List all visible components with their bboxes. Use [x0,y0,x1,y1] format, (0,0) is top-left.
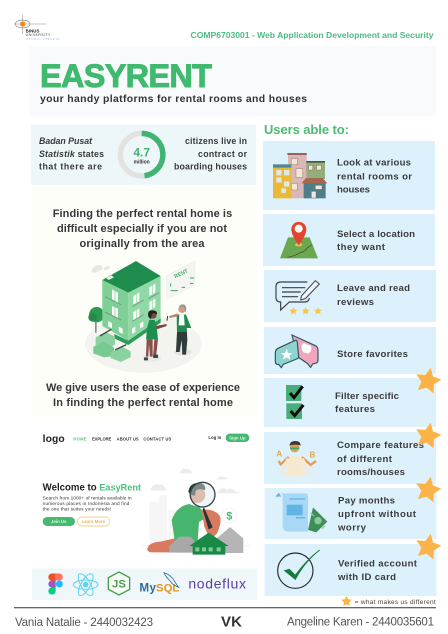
problem statement: difficult especially if you are not [57,223,227,235]
icon: star on verified feature [413,531,443,560]
text: upfront without [338,509,417,520]
text: houses [337,184,370,195]
icon: person comparing A and B [276,441,316,476]
text [337,559,418,583]
text: with ID card [337,572,396,583]
text [337,229,415,253]
icon: map pin [280,222,318,258]
text: Pay months [338,496,395,507]
hero illustration [142,469,250,555]
text [337,496,417,534]
statistic intro text [39,136,104,172]
text: Filter specific [335,391,400,402]
navigation bar: CONTACT US [143,437,172,442]
icon: star on filter feature [413,365,443,394]
statistic closing text: citizens live in [185,136,247,146]
hero text [43,483,141,511]
problem statement [53,208,232,250]
boxes [93,329,131,362]
donut chart: 4.7 million: 4.7 [133,146,150,160]
hero buttons: Join Us [51,519,67,524]
statistic closing text [174,136,248,172]
icon: favorite bubbles [275,335,318,368]
footer: author right: Angeline Karen - 2440035601 [287,617,434,629]
panel: technology logos [32,568,257,600]
hero illustration: $ [226,510,232,522]
solution statement: We give users the ease of experience [46,382,240,394]
hero buttons [43,517,110,526]
logo: BINUS University: UNIVERSITY [26,33,51,37]
hero text: Welcome to [43,483,97,494]
navigation bar: Sign Up [229,435,246,440]
text: of different [337,454,393,465]
icon: Node.js: JS [112,579,126,591]
panel: statistic [31,124,256,185]
footer: initials: VK [221,614,242,630]
legend: star meaning [341,596,436,606]
icon: React [73,572,98,598]
logo: BINUS University: Innovation in Education [26,38,60,41]
text: Select a location [337,229,415,240]
panel: filter feature [264,378,436,427]
problem statement: originally from the area [80,238,205,250]
panel: payment feature [264,488,436,539]
hero text: numerous places in Indonesia and find [43,501,130,506]
text: Verified account [338,559,418,570]
text: Compare features [337,440,424,451]
icon: Nodeflux: nodeflux [188,576,246,592]
statistic closing text: boarding houses [174,162,247,172]
title: EASYRENT [40,58,212,94]
panel: compare feature [264,432,436,484]
logo: BINUS University [14,15,60,41]
icon: houses [273,153,327,198]
solution statement [46,382,240,409]
text: Store favorites [337,349,408,360]
icon: MySQL: My [139,581,157,594]
panel: rental listings feature [263,141,435,210]
text [337,440,424,478]
panel: problem and solution [32,188,257,417]
statistic closing text: contract or [198,149,248,159]
hero text: the one that suites your needs! [43,506,111,511]
course title: COMP6703001 - Web Application Development and Security [190,30,434,40]
icon: star on compare feature [413,420,443,449]
icon: Node.js [108,572,130,595]
navigation bar: ABOUT US [117,437,139,442]
navigation bar: logo [43,434,65,445]
navigation bar: EXPLORE [92,437,112,442]
text [337,158,412,195]
text: reviews [337,297,374,308]
icon: person comparing A and B: A [276,450,282,459]
statistic intro text: Badan Pusat [39,136,93,146]
icon: MySQL [139,573,179,594]
text: Leave and read [337,283,410,294]
panel: location feature [263,214,435,266]
icon: star on payment feature [413,474,443,503]
panel: favorites feature [264,327,436,374]
heading: users able to: Users able to: [264,122,349,137]
person: agent [167,304,191,355]
footer: author left: Vania Natalie - 2440032423 [15,617,153,629]
subtitle: your handy platforms for rental rooms and houses [40,94,307,105]
panel: header [29,46,436,116]
illustration: building and rental handover [85,261,202,373]
statistic intro text: that there are [39,162,102,172]
donut chart: 4.7 million [120,133,163,176]
text: features [335,404,375,415]
panel: reviews feature [264,270,436,322]
icon: person comparing A and B: B [310,450,316,459]
tree [88,307,104,333]
text: rooms/houses [337,467,405,478]
donut chart: 4.7 million: million [134,160,150,166]
rent sign: RENT [174,268,190,280]
problem statement: Finding the perfect rental home is [53,208,232,220]
legend: star meaning: = what makes us different [355,599,436,606]
building [102,261,161,345]
icon: checkboxes [286,385,303,419]
panel: website mockup [32,425,257,568]
person: renter [142,310,167,362]
navigation bar [43,434,249,445]
hero text: EasyRent [99,483,141,493]
text: worry [337,523,367,534]
navigation bar: HOME [73,437,87,442]
hero buttons: Learn More [82,519,106,524]
text: rental rooms or [337,171,412,182]
icon: verified check [278,550,320,588]
panel: verified account feature [264,544,436,596]
icon: MySQL: SQL [156,582,179,594]
text: they want [337,242,386,253]
icon: review bubble [276,281,322,314]
icon: receipt and cash [275,493,327,532]
statistic intro text: Statistik states [39,149,104,159]
text: Look at various [337,158,411,169]
text [335,391,400,415]
text [337,283,410,308]
logo: BINUS University: BINUS [26,28,39,33]
icon: Figma [48,573,63,595]
navigation bar: Log In [208,435,222,440]
solution statement: In finding the perfect rental home [53,397,233,409]
hero text: Search from 1000+ of rentals available in [43,495,132,500]
